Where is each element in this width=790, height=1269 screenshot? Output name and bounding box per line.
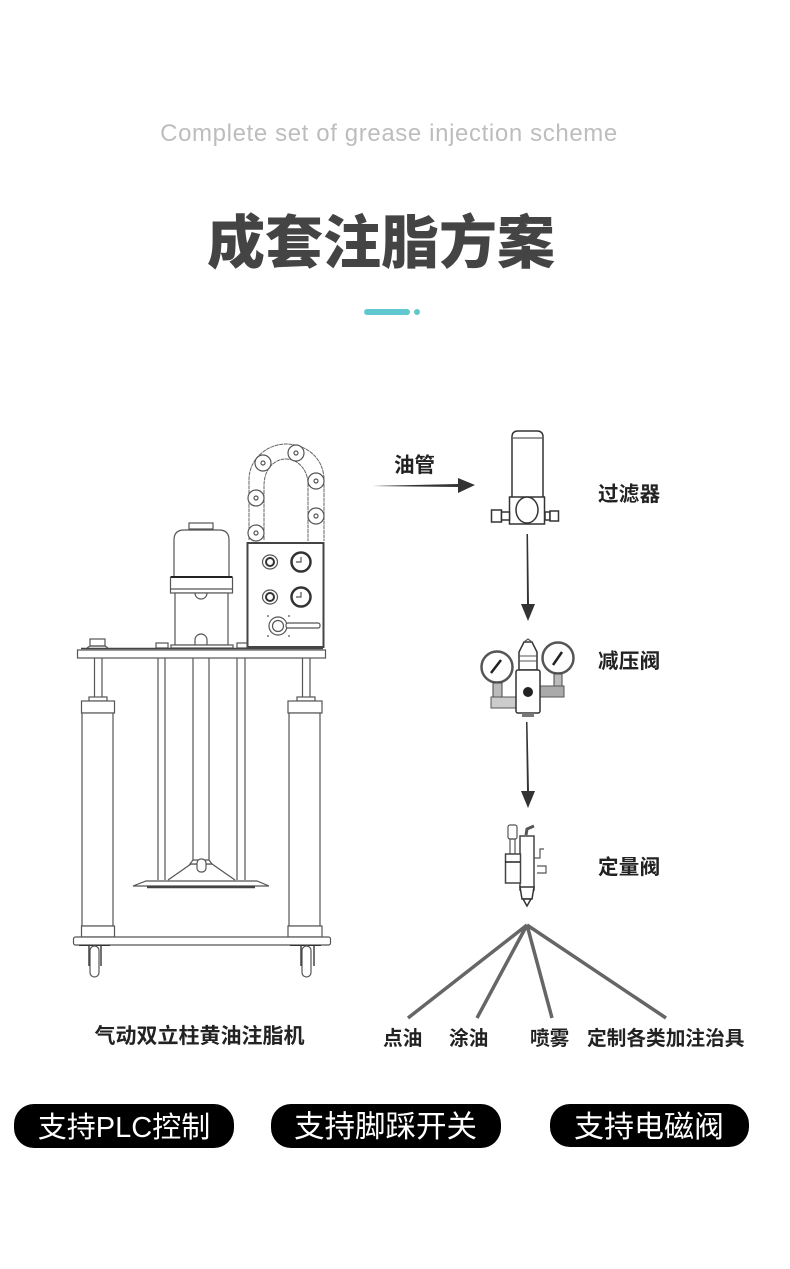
badge: solenoid valve: 支持电磁阀 (574, 1111, 724, 1144)
icon: filter (492, 431, 558, 524)
icon: dosing valve (505, 825, 546, 906)
top plate (78, 639, 326, 658)
arrow: filter to regulator (521, 534, 535, 621)
subtitle: Complete set of grease injection scheme (160, 120, 618, 147)
badge: foot switch (271, 1104, 501, 1148)
guide rods (158, 658, 245, 880)
arrow: hose (372, 478, 475, 493)
machine illustration (74, 444, 330, 977)
branch lines (408, 925, 666, 1018)
regulator label: 减压阀 (598, 650, 660, 673)
arrow: regulator to dosing valve (521, 722, 535, 808)
wheels (79, 946, 321, 977)
title: 成套注脂方案 (207, 211, 555, 276)
control box (248, 543, 324, 647)
follower plate (133, 859, 269, 887)
output labels: 涂油 (449, 1027, 488, 1050)
right lift cylinder (288, 658, 322, 937)
drag chain (248, 444, 324, 541)
dosing valve label: 定量阀 (598, 855, 660, 879)
badge: foot switch: 支持脚踩开关 (294, 1110, 477, 1144)
base plate (74, 937, 330, 945)
title accent (364, 309, 420, 315)
output labels (383, 1027, 745, 1050)
hose label: 油管 (394, 454, 435, 477)
badge: solenoid valve (550, 1104, 749, 1147)
icon: pressure regulator (482, 639, 574, 717)
badge: PLC control (14, 1104, 234, 1148)
machine label: 气动双立柱黄油注脂机 (94, 1024, 304, 1048)
pump head (156, 523, 247, 648)
output labels: 喷雾 (530, 1028, 570, 1050)
output labels: 点油 (383, 1028, 422, 1050)
output labels: 定制各类加注治具 (587, 1027, 745, 1050)
filter label: 过滤器 (598, 483, 661, 506)
left lift cylinder (82, 658, 114, 937)
badge: PLC control: 支持PLC控制 (38, 1111, 210, 1144)
